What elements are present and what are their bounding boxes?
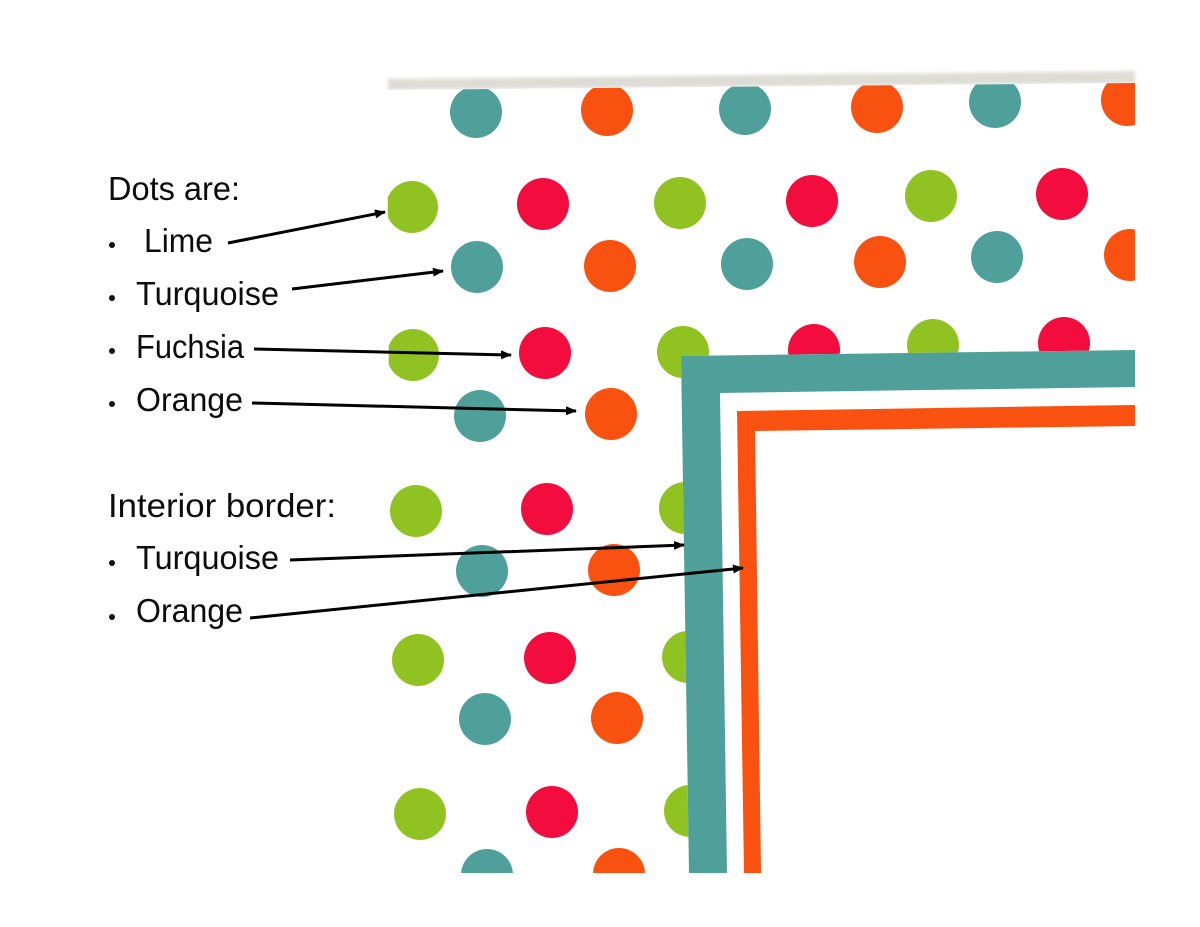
legend: interior border [108, 487, 336, 629]
legend: dots [108, 170, 279, 418]
item: lime [109, 222, 213, 259]
item: orange: Orange [136, 381, 243, 418]
orange border [737, 405, 1135, 873]
item: turquoise: Turquoise [136, 275, 279, 312]
turquoise border [681, 350, 1135, 873]
item: border orange: Orange [136, 592, 243, 629]
item: lime: Lime [144, 222, 213, 259]
lime dots [386, 170, 959, 840]
item: border turquoise: Turquoise [136, 539, 279, 576]
arrow: fuchsia [254, 349, 511, 355]
arrow: border turquoise [290, 545, 684, 560]
fuchsia dots [517, 168, 1090, 838]
turquoise dots [450, 76, 1023, 901]
heading: dots are: Dots are: [108, 170, 240, 207]
arrow: orange [252, 403, 576, 411]
orange dots [581, 74, 1156, 900]
polka dot paper [380, 70, 1156, 901]
paper shadow edge [388, 71, 1135, 90]
arrow: turquoise [292, 271, 443, 289]
heading: interior border: Interior border: [108, 487, 336, 524]
arrow: lime [228, 212, 385, 243]
interior white panel [681, 350, 1089, 837]
arrows [228, 212, 743, 618]
item: fuchsia: Fuchsia [136, 328, 245, 365]
arrow: border orange [250, 568, 743, 618]
